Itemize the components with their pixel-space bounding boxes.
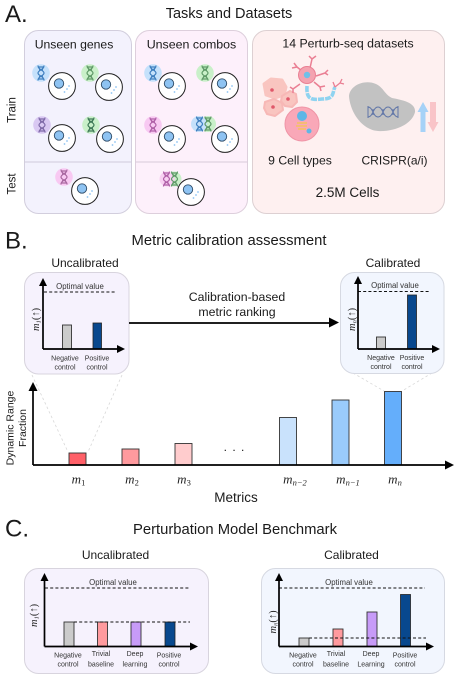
icon: round cell xyxy=(285,107,319,141)
axis label: Dynamic Range Fraction: Dynamic Range xyxy=(4,391,16,465)
panel: model benchmark calibrated: (↑) xyxy=(268,610,279,623)
metric labels: m xyxy=(177,472,187,486)
panel: model benchmark uncalibrated: Positive xyxy=(157,652,181,660)
metric labels: m xyxy=(72,472,81,486)
dots: . . . xyxy=(224,440,245,454)
panel: model benchmark calibrated: Optimal value xyxy=(325,578,373,587)
text: CRISPR(a/i): CRISPR(a/i) xyxy=(361,154,428,168)
panel: model benchmark uncalibrated: Trivial xyxy=(92,651,111,658)
panel: uncalibrated chart: Negative xyxy=(51,356,79,362)
heading: Calibrated: Calibrated xyxy=(366,256,420,270)
panel: model benchmark calibrated: Learning xyxy=(357,662,385,668)
bar chart: dynamic range fraction xyxy=(28,382,454,488)
text: 9 Cell types: 9 Cell types xyxy=(268,154,332,168)
panel: model benchmark uncalibrated: m xyxy=(29,619,40,627)
panel: model benchmark uncalibrated: learning xyxy=(123,662,148,668)
panel: Perturb-seq datasets xyxy=(252,30,444,214)
panel: unseen genes: Unseen genes xyxy=(35,38,113,52)
metric labels xyxy=(72,472,402,488)
title: Perturbation Model Benchmark: Perturbation Model Benchmark xyxy=(133,522,338,538)
panel letter B: B. xyxy=(5,228,28,254)
axis label: Dynamic Range Fraction: Fraction xyxy=(17,409,29,447)
panel: uncalibrated chart: (↑) xyxy=(31,307,42,320)
panel: calibrated chart: Positive xyxy=(400,355,424,362)
metric labels: 1 xyxy=(81,478,85,488)
panel: unseen genes xyxy=(24,30,132,214)
panel: uncalibrated chart: control xyxy=(54,364,76,372)
panel: model benchmark uncalibrated: 1 xyxy=(34,616,40,619)
panel: model benchmark uncalibrated xyxy=(24,568,208,674)
panel: calibrated chart: m xyxy=(347,323,358,331)
arrow: calibration-based ranking xyxy=(129,318,339,328)
panel: calibrated chart: Negative xyxy=(367,355,395,362)
panel: uncalibrated chart: m xyxy=(31,323,42,331)
title: Metric calibration assessment: Metric calibration assessment xyxy=(132,233,326,249)
panel: unseen combos: Unseen combos xyxy=(147,38,236,52)
heading: Calibrated: Calibrated xyxy=(324,548,379,562)
panel: model benchmark calibrated: m xyxy=(268,626,279,634)
metric labels: n−1 xyxy=(346,478,360,488)
icon: CRISPR complex xyxy=(349,82,415,131)
panel: model benchmark uncalibrated: (↑) xyxy=(29,603,40,616)
panel: calibrated chart: control xyxy=(401,364,423,371)
text: 14 Perturb-seq datasets: 14 Perturb-seq datasets xyxy=(282,36,414,50)
panel letter A: A. xyxy=(5,1,28,28)
panel: model benchmark calibrated xyxy=(262,568,444,674)
panel: model benchmark uncalibrated: control xyxy=(57,662,79,668)
panel: uncalibrated chart xyxy=(24,272,129,374)
panel: model benchmark calibrated: Deep xyxy=(363,651,379,658)
text: calibration-based metric ranking: metric ranking xyxy=(198,305,276,319)
panel: uncalibrated chart: Optimal value xyxy=(56,282,104,291)
label: Test: Test xyxy=(6,173,18,195)
text: 2.5M Cells: 2.5M Cells xyxy=(316,185,380,200)
panel: model benchmark uncalibrated: Negative xyxy=(54,652,82,660)
panel: uncalibrated chart: control xyxy=(86,364,108,372)
metric labels: m xyxy=(388,472,398,486)
panel: calibrated chart xyxy=(340,272,444,374)
panel: calibrated chart: control xyxy=(370,364,392,371)
metric labels: n−2 xyxy=(293,478,308,488)
panel: model benchmark calibrated: control xyxy=(394,662,416,668)
label: Train: Train xyxy=(6,97,18,123)
panel: model benchmark calibrated: Trivial xyxy=(327,651,346,658)
panel: model benchmark uncalibrated: control xyxy=(158,662,180,668)
metric labels: n xyxy=(398,478,402,488)
panel letter C: C. xyxy=(5,516,29,542)
panel: unseen combos xyxy=(136,30,248,214)
metric labels: 3 xyxy=(187,478,191,488)
panel: calibrated chart: Optimal value xyxy=(371,281,419,290)
axis label: Metrics: Metrics xyxy=(214,490,258,505)
icon: up and down arrows xyxy=(418,102,438,132)
icon: neuron xyxy=(290,56,344,99)
panel: model benchmark calibrated: n xyxy=(272,623,280,626)
panel: model benchmark uncalibrated: Optimal value xyxy=(89,578,137,587)
text: calibration-based metric ranking: Calibration-based xyxy=(189,290,285,304)
panel: model benchmark calibrated: Negative xyxy=(289,652,317,660)
panel: model benchmark uncalibrated: Deep xyxy=(127,651,143,658)
icon: epithelial cells xyxy=(264,79,297,116)
panel: calibrated chart: n xyxy=(352,320,358,323)
panel: uncalibrated chart: 1 xyxy=(36,320,42,323)
callout guide lines xyxy=(32,373,432,452)
panel: model benchmark calibrated: Positive xyxy=(393,652,417,660)
metric labels: m xyxy=(125,472,135,486)
panel: model benchmark calibrated: control xyxy=(292,662,314,668)
panel: model benchmark uncalibrated: baseline xyxy=(88,662,114,668)
heading: Uncalibrated: Uncalibrated xyxy=(82,548,149,562)
metric labels: m xyxy=(283,472,293,486)
metric labels: 2 xyxy=(135,478,139,488)
panel: calibrated chart: (↑) xyxy=(347,307,358,320)
panel: uncalibrated chart: Positive xyxy=(85,356,109,362)
heading: Uncalibrated: Uncalibrated xyxy=(51,256,119,270)
title: Tasks and Datasets: Tasks and Datasets xyxy=(166,6,292,22)
panel: model benchmark calibrated: baseline xyxy=(323,662,349,668)
metric labels: m xyxy=(336,472,346,486)
